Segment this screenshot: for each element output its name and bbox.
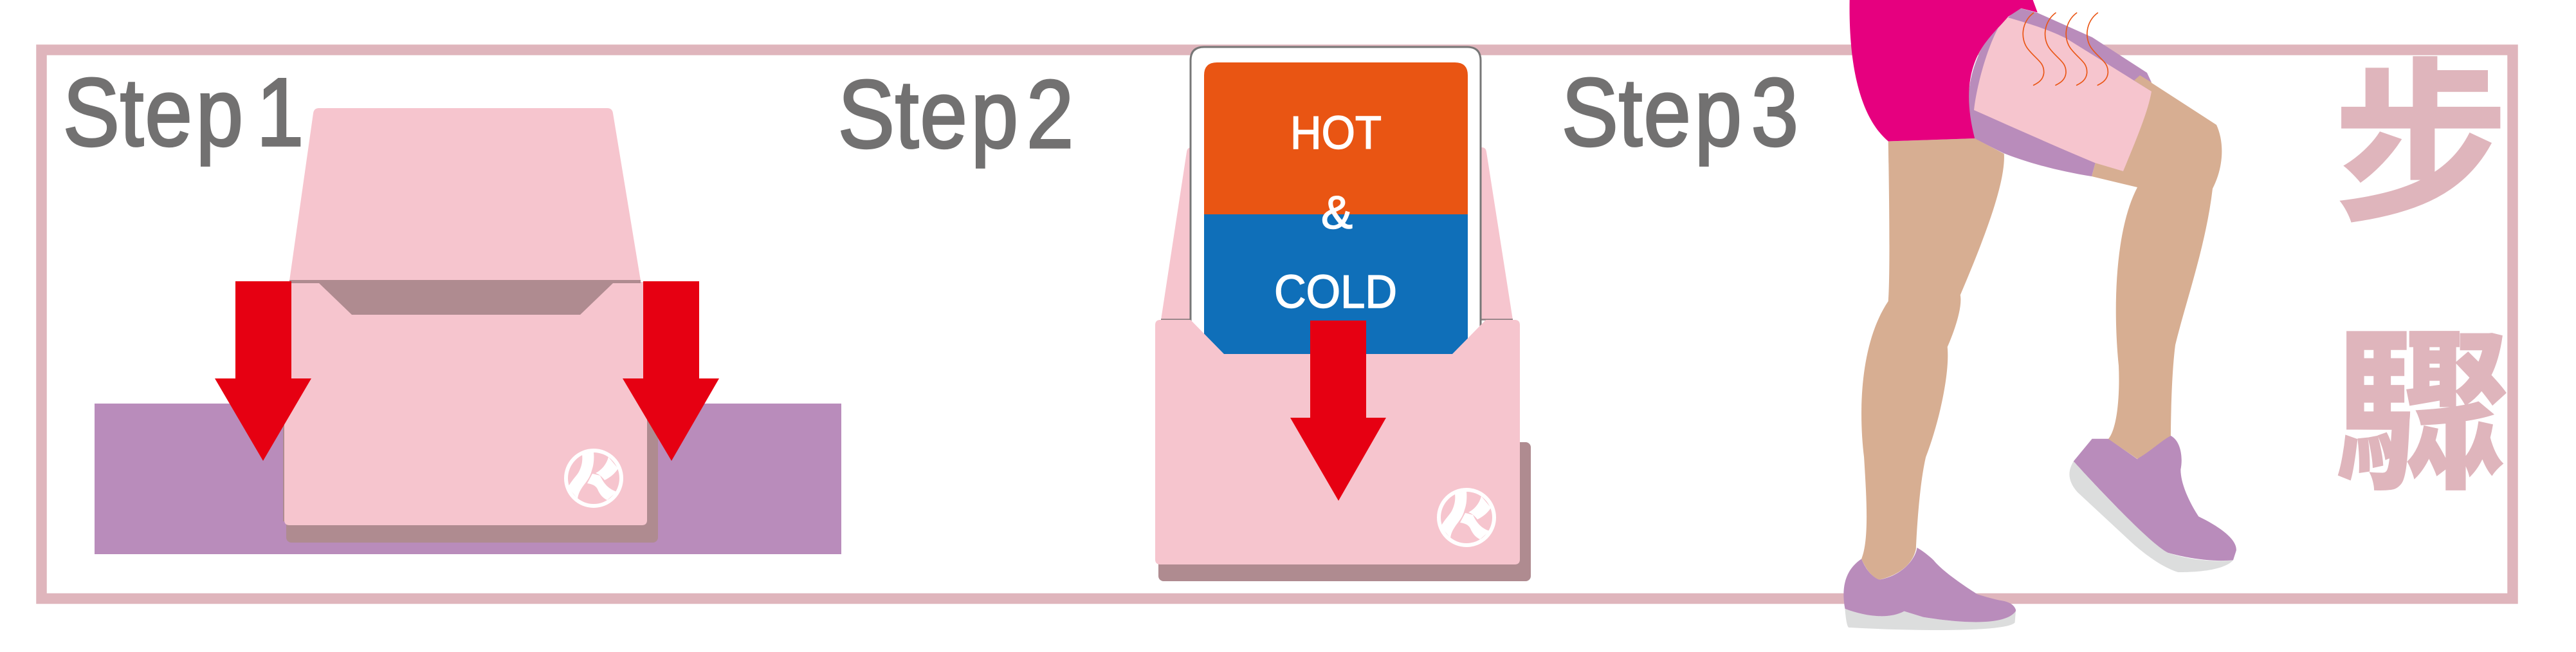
panel: step 1 (63, 58, 841, 554)
icon: logo (566, 451, 621, 506)
heading: Step3: t (1619, 58, 1642, 166)
figure: legs (1843, 0, 2236, 630)
pack back flap (1161, 147, 1513, 320)
heading: Step2: t (895, 60, 918, 168)
front leg (1861, 138, 2004, 580)
heading: Step3: S (1562, 58, 1618, 166)
heat waves (2023, 13, 2108, 85)
character: 步: 步 (2334, 48, 2508, 243)
label: HOT: HOT (1290, 107, 1382, 159)
heading: Step2: p (971, 60, 1018, 168)
pack body (284, 282, 647, 525)
shoe: back foot (2074, 436, 2236, 561)
heading: Step1: e (145, 58, 192, 166)
back leg (2092, 75, 2222, 459)
arrow: right down (623, 281, 719, 461)
character: 驟: 驟 (2335, 316, 2510, 512)
icon: logo (1439, 490, 1494, 545)
hot pack on thigh (1974, 17, 2151, 171)
pack edge (283, 412, 289, 521)
pack shadow (1158, 442, 1531, 581)
knee cover (2134, 75, 2151, 91)
heading: Step3: e (1643, 58, 1691, 166)
heading: Step3: p (1695, 58, 1742, 166)
card outline (1191, 47, 1481, 386)
heading: Step1: 1 (257, 58, 304, 166)
heading: Step1: S (63, 58, 120, 166)
flap crease (1161, 319, 1513, 321)
label: COLD: COLD (1274, 266, 1397, 318)
heading: Step2: e (920, 60, 967, 168)
purple surface (95, 404, 841, 554)
arrow: down (1290, 321, 1386, 501)
pack shadow (286, 412, 658, 543)
shoe: front foot (1843, 548, 2016, 622)
arrow: left down (215, 281, 311, 461)
label: ampersand: & (1321, 187, 1353, 239)
heading: Step2: S (838, 60, 895, 168)
panel: step 3 (1562, 0, 2236, 630)
thigh sleeve (1968, 8, 2151, 176)
heading: Step1: t (120, 58, 143, 166)
pack back flap (289, 108, 641, 281)
card: hot side (1204, 62, 1468, 214)
card: cold side (1204, 214, 1468, 362)
shorts (1850, 0, 2038, 142)
heading: Step3: 3 (1751, 58, 1798, 166)
shoe sole: front foot (1845, 609, 2016, 630)
panel: step 2 (838, 47, 1531, 581)
pack body (1155, 320, 1520, 564)
heading: Step2: 2 (1027, 60, 1073, 168)
shoe sole: back foot (2069, 461, 2233, 572)
heading: Step1: p (196, 58, 243, 166)
pack opening (289, 280, 641, 315)
vertical title: 步驟 (2334, 48, 2510, 512)
